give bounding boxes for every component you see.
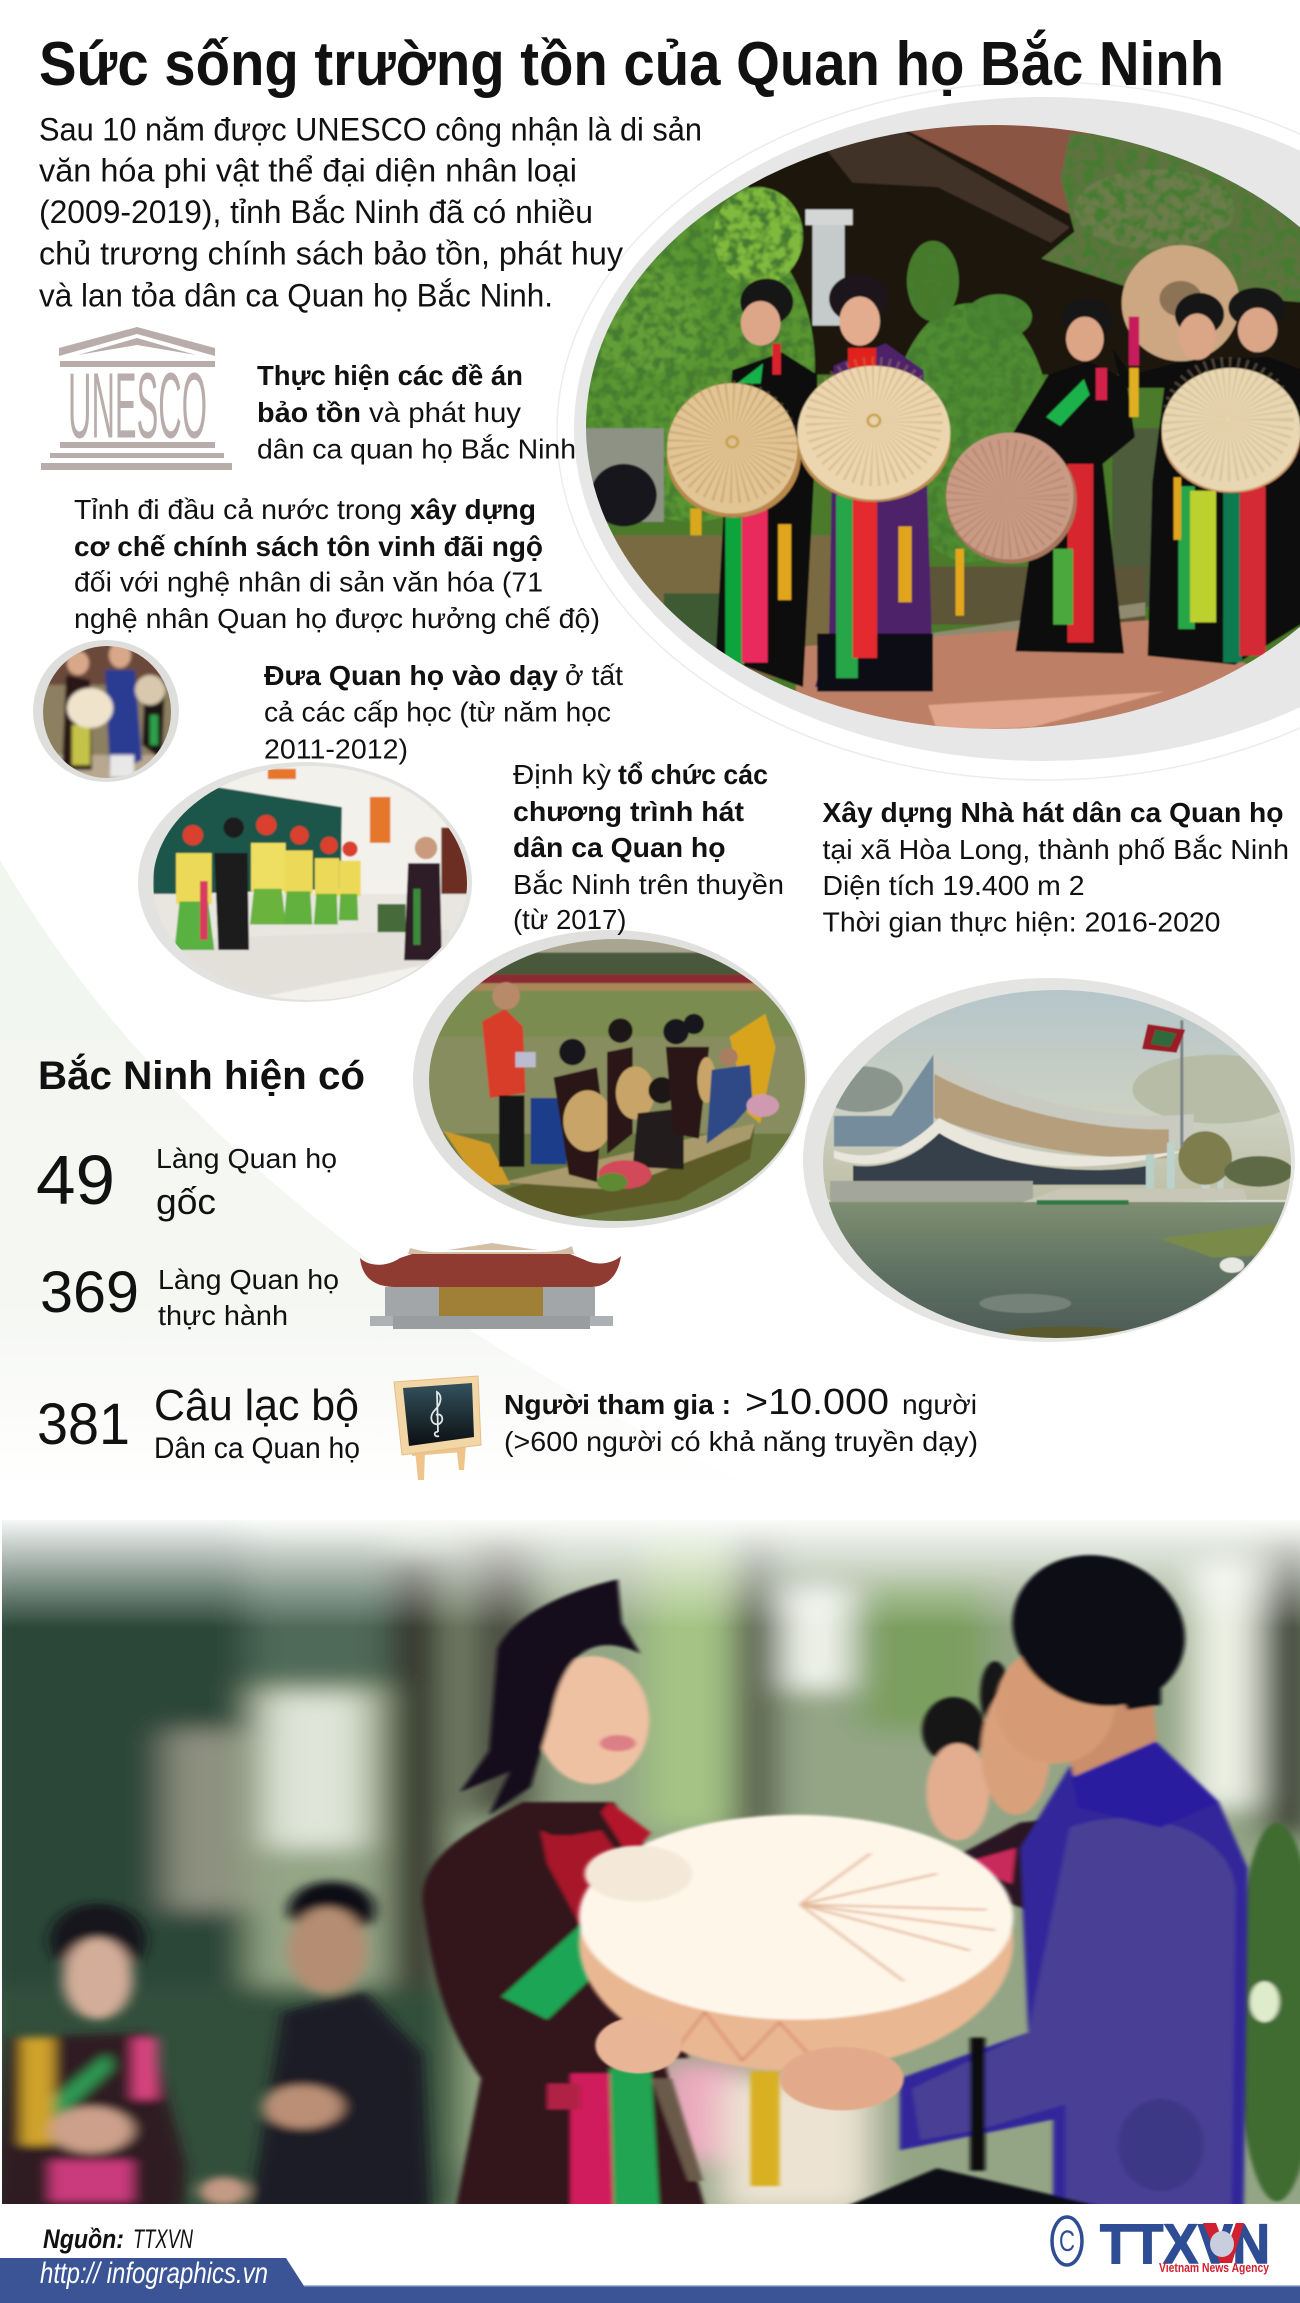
intro text: chủ trương chính sách bảo tồn, phát huy (39, 236, 623, 272)
text block: boat performances: Định kỳ (513, 759, 611, 790)
man in red vest (482, 1009, 526, 1098)
stat: 369 villages: 369 (40, 1260, 139, 1325)
text block: conservation projects: và phát huy (369, 397, 521, 428)
text block: conservation projects: bảo tồn (257, 397, 361, 428)
woman 1 (716, 352, 817, 687)
intro text: Sau 10 năm được UNESCO công nhận là di sản (39, 112, 702, 148)
photo: couple exchanging a conical hat (0, 1500, 1300, 2227)
text block: honouring artisans: nghệ nhân Quan họ được hưởng chế độ) (74, 603, 600, 634)
photo: singers on a dragon boat (413, 930, 816, 1231)
stat: 381 clubs: 381 (37, 1392, 130, 1457)
intro text: (2009-2019), tỉnh Bắc Ninh đã có nhiều (39, 194, 593, 230)
text block: boat performances (513, 759, 784, 935)
source line: TTXVN (133, 2224, 193, 2254)
text block: teaching in schools (264, 660, 623, 765)
intro text (39, 112, 702, 314)
footer bar with website: http:// infographics.vn (40, 2257, 268, 2290)
text block: teaching in schools: cả các cấp học (từ năm học (264, 696, 611, 727)
source line (43, 2224, 193, 2254)
blurred people left (0, 1881, 431, 2217)
hands (595, 2017, 904, 2110)
text block: Quan ho theatre: Diện tích 19.400 m 2 (822, 870, 1084, 901)
text block: participants (504, 1381, 978, 1457)
stat: 381 clubs: Câu lạc bộ (154, 1381, 359, 1430)
text block: honouring artisans: xây dựng (410, 494, 536, 525)
women 4 and 5 (1112, 348, 1300, 665)
woman 2 (815, 343, 933, 687)
text block: Quan ho theatre: tại xã Hòa Long, thành phố Bắc Ninh (822, 834, 1289, 865)
footer bar with website (0, 2257, 1300, 2303)
text block: teaching in schools: ở tất (565, 660, 623, 691)
text block: boat performances: chương trình hát (513, 796, 744, 827)
panel: main photo of Quan ho singers (557, 80, 1300, 780)
stat: 369 villages: thực hành (158, 1300, 288, 1331)
stat: 49 villages: Làng Quan họ (156, 1143, 337, 1174)
logo: TTXVN Vietnam News Agency: C (1059, 2225, 1075, 2258)
stat: 381 clubs (37, 1381, 360, 1465)
text block: conservation projects: Thực hiện các đề án (257, 360, 523, 391)
text block: participants: >10.000 (745, 1381, 889, 1422)
stat: 381 clubs: Dân ca Quan họ (154, 1432, 360, 1465)
intro text: văn hóa phi vật thể đại diện nhân loại (39, 153, 577, 189)
text block: boat performances: Bắc Ninh trên thuyền (513, 869, 784, 900)
text block: honouring artisans: đối với nghệ nhân di sản văn hóa (71 (74, 566, 543, 598)
blurred people right (922, 1661, 1300, 2201)
woman (423, 1548, 1248, 2207)
background swoosh (0, 860, 760, 1490)
text block: Quan ho theatre (822, 797, 1289, 938)
stat: 49 villages (36, 1141, 337, 1222)
stat: 369 villages (40, 1260, 339, 1331)
stat: 49 villages: gốc (156, 1181, 216, 1222)
photo: theatre building on lake (803, 978, 1300, 1344)
intro text: và lan tỏa dân ca Quan họ Bắc Ninh. (39, 278, 553, 314)
text: UNESCO (68, 354, 207, 458)
text block: Quan ho theatre: Thời gian thực hiện: 2016-2020 (822, 906, 1220, 938)
text block: participants: (>600 người có khả năng truyền dạy) (504, 1426, 978, 1457)
text block: boat performances: (từ 2017) (513, 904, 626, 935)
woman 3 (1013, 361, 1135, 654)
text block: participants: người (902, 1389, 977, 1420)
text block: honouring artisans: Tỉnh đi đầu cả nước trong (74, 494, 402, 525)
text block: conservation projects: dân ca quan họ Bắc Ninh (257, 434, 576, 464)
text block: Quan ho theatre: Xây dựng Nhà hát dân ca Quan họ (822, 797, 1284, 828)
logo: TTXVN Vietnam News Agency: TTXVN (1100, 2212, 1270, 2275)
text block: conservation projects (257, 360, 576, 464)
text block: boat performances: dân ca Quan họ (513, 832, 726, 863)
text block: honouring artisans (74, 494, 600, 634)
stat: 49 villages: 49 (36, 1141, 115, 1219)
icon: UNESCO temple logo (41, 327, 232, 470)
pupils (176, 853, 212, 904)
logo: TTXVN Vietnam News Agency: Vietnam News Agency (1159, 2260, 1270, 2275)
stat: 369 villages: Làng Quan họ (158, 1264, 339, 1295)
icon: communal house (360, 1243, 621, 1329)
text block: honouring artisans: cơ chế chính sách tôn vinh đãi ngộ (74, 531, 543, 562)
source line: Nguồn: (43, 2224, 124, 2254)
man (900, 1730, 1248, 2207)
icon: chalkboard with treble clef (394, 1376, 481, 1480)
text block: teaching in schools: 2011-2012) (264, 734, 408, 765)
text block: boat performances: tổ chức các (618, 759, 768, 790)
text block: teaching in schools: Đưa Quan họ vào dạy (264, 660, 558, 691)
photo: small circle with performers (33, 640, 179, 785)
text block: participants: Người tham gia : (504, 1389, 731, 1420)
singers (531, 1098, 566, 1164)
straw hat (579, 1815, 1013, 2186)
heading: Bac Ninh currently has: Bắc Ninh hiện có (38, 1052, 365, 1098)
photo: classroom singing (138, 761, 480, 1011)
